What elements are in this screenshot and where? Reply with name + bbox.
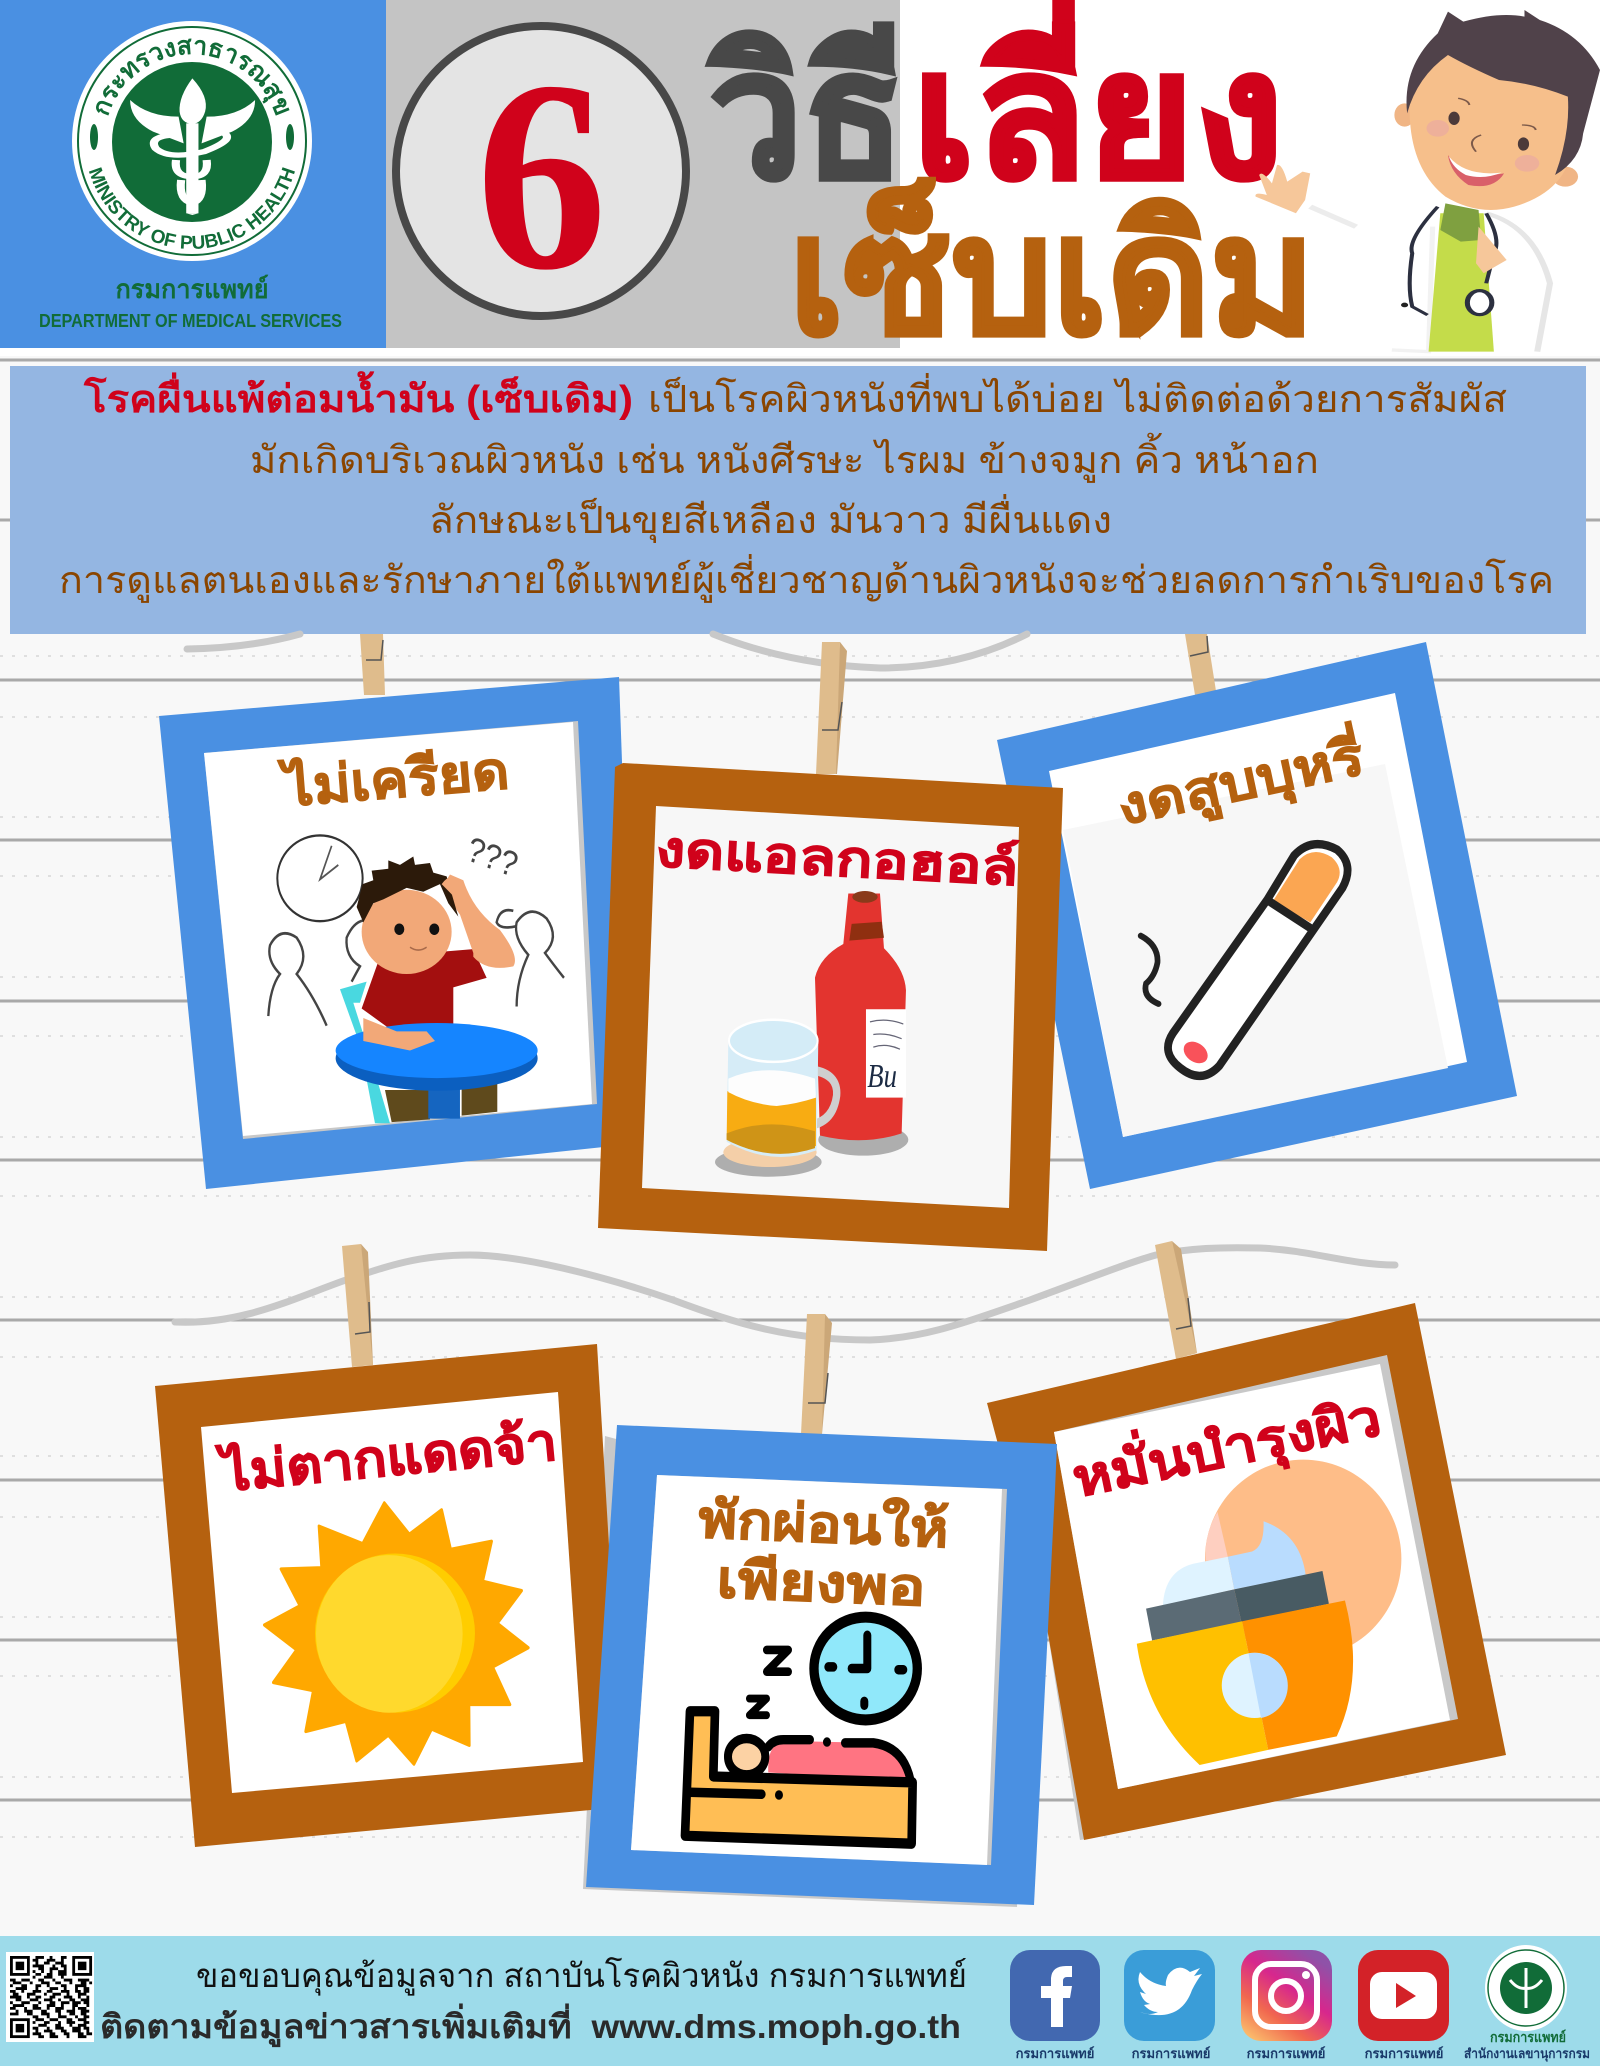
social handle labels: กรมการแพทย์ bbox=[1247, 2046, 1325, 2061]
title: second line brown word: เซ็บเดิม bbox=[789, 178, 1315, 368]
social handle labels: กรมการแพทย์ bbox=[1132, 2046, 1210, 2061]
panel: no smoking bbox=[997, 642, 1517, 1189]
social handle labels bbox=[1016, 2046, 1590, 2062]
clothesline: bottom rope bbox=[175, 1248, 1395, 1340]
icon: cream jar bbox=[1137, 1460, 1401, 1765]
panel: no stress bbox=[159, 677, 632, 1189]
footer band bbox=[0, 1936, 1600, 2072]
clothespin 5 bbox=[801, 1314, 832, 1434]
label: get enough rest line 1: พักผ่อนให้ bbox=[698, 1489, 950, 1559]
small logo caption: กรมการแพทย์ bbox=[1490, 2029, 1566, 2045]
title: first line red word: เลี่ยง bbox=[912, 0, 1284, 215]
intro text panel: เป็นโรคผิวหนังที่พบได้บ่อย ไม่ติดต่อด้วยการสัมผัส bbox=[648, 373, 1507, 421]
clothesline: top rope bbox=[187, 634, 1027, 668]
header: ministry logo panel: กรมการแพทย์ bbox=[116, 274, 268, 304]
header: ministry logo panel: DEPARTMENT OF MEDICAL SERVICES bbox=[39, 311, 342, 331]
icon: instagram bbox=[1241, 1950, 1332, 2041]
icon: sleeping person and clock bbox=[685, 1617, 917, 1844]
header: ministry logo panel bbox=[0, 0, 386, 348]
website text: ติดตามข้อมูลข่าวสารเพิ่มเติมที่ www.dms.moph.go.th bbox=[100, 2003, 961, 2048]
intro text panel: การดูแลตนเองและรักษาภายใต้แพทย์ผู้เชี่ยวชาญด้านผิวหนังจะช่วยลดการกำเริบของโรค bbox=[59, 554, 1554, 603]
QR code bbox=[6, 1952, 94, 2042]
icon: youtube bbox=[1358, 1950, 1449, 2041]
intro text panel: ลักษณะเป็นขุยสีเหลือง มันวาว มีผื่นแดง bbox=[429, 494, 1112, 543]
icon: stressed boy at table bbox=[268, 829, 564, 1123]
label: avoid strong sun: ไม่ตากแดดจ้า bbox=[214, 1412, 560, 1503]
label: moisturize skin: หมั่นบำรุงผิว bbox=[1066, 1381, 1387, 1512]
credit text: ขอขอบคุณข้อมูลจาก สถาบันโรคผิวหนัง กรมการแพทย์ bbox=[196, 1957, 967, 1996]
header: grey number panel: 6 bbox=[476, 25, 607, 326]
header: grey number panel bbox=[386, 0, 900, 348]
title: first line dark word: วิธี bbox=[707, 16, 905, 215]
header: ministry logo panel: MINISTRY OF PUBLIC HEALTH bbox=[89, 167, 295, 249]
header: ministry logo panel: กระทรวงสาธารณสุข bbox=[96, 38, 290, 116]
social handle labels: สำนักงานเลขานุการกรม bbox=[1464, 2046, 1590, 2062]
label: get enough rest line 2: เพียงพอ bbox=[716, 1551, 927, 1617]
icon: bottle and beer mug bbox=[715, 891, 908, 1177]
icon: bottle and beer mug: Bu bbox=[867, 1057, 897, 1095]
shadow behind rest panel bbox=[583, 1436, 1030, 1907]
icon: facebook bbox=[1010, 1950, 1100, 2041]
clothespin 4 bbox=[342, 1244, 373, 1367]
icon: doctor illustration bbox=[1255, 10, 1600, 352]
social handle labels: กรมการแพทย์ bbox=[1016, 2046, 1094, 2061]
clothespin 6 bbox=[1155, 1241, 1197, 1359]
intro text panel: มักเกิดบริเวณผิวหนัง เช่น หนังศีรษะ ไรผม ข้างจมูก คิ้ว หน้าอก bbox=[250, 432, 1319, 483]
label: no alcohol: งดแอลกอฮอล์ bbox=[654, 821, 1020, 896]
icon: twitter bbox=[1124, 1950, 1215, 2041]
icon: cigarette bbox=[1141, 844, 1348, 1076]
intro text panel: โรคผื่นแพ้ต่อมน้ำมัน (เซ็บเดิม) bbox=[83, 371, 633, 421]
clothespin 3 bbox=[1185, 634, 1216, 695]
panel: get enough rest bbox=[586, 1425, 1057, 1905]
panel: avoid strong sun bbox=[155, 1344, 612, 1847]
clothespin 1 bbox=[360, 634, 385, 695]
icon: sun bbox=[264, 1503, 528, 1764]
icon: small ministry logo bbox=[1485, 1945, 1567, 2031]
icon: stressed boy at table: ??? bbox=[463, 829, 522, 884]
label: no stress: ไม่เครียด bbox=[277, 740, 511, 818]
social handle labels: กรมการแพทย์ bbox=[1365, 2046, 1443, 2061]
panel: no alcohol bbox=[598, 763, 1063, 1251]
clothespin 2 bbox=[816, 642, 847, 774]
panel: moisturize skin bbox=[987, 1303, 1506, 1840]
intro text panel bbox=[10, 366, 1586, 634]
label: no smoking: งดสูบบุหรี่ bbox=[1111, 720, 1370, 840]
